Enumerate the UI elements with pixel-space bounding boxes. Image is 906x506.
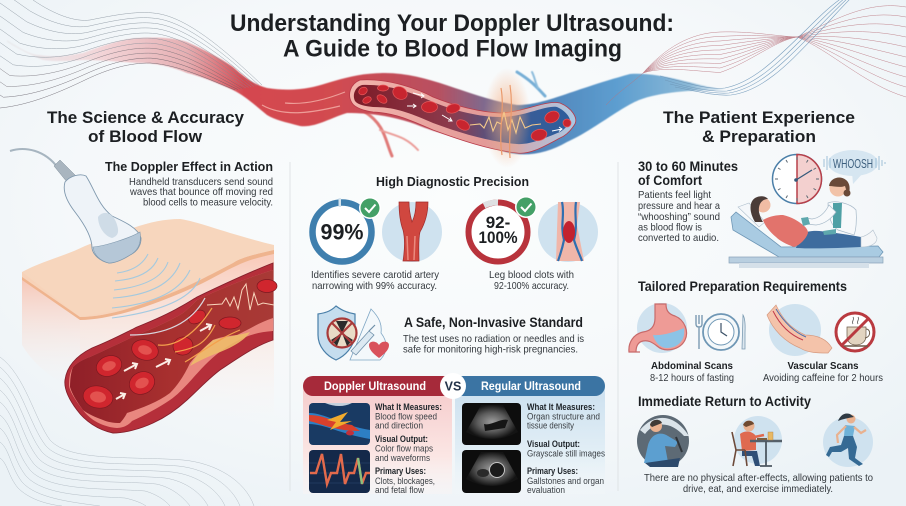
probe tip [93,232,140,263]
ultrasound glow [483,68,531,168]
skin edge band [22,250,274,320]
doppler details: What It Measures: [375,402,442,412]
left heading: The Science & Accuracy [47,108,245,127]
artery inner wall [69,270,273,428]
caption: leg clots: Leg blood clots with [489,269,574,281]
regular details: Grayscale still images [527,448,605,458]
doppler details: Clots, blockages, [375,476,435,486]
sound waves [112,254,205,335]
doppler effect text block [105,159,273,208]
bed legs [739,263,869,268]
pillow [738,203,765,227]
doppler effect text block: blood cells to measure velocity. [143,196,273,208]
title: A Guide to Blood Flow Imaging [283,36,622,62]
probe neck [54,160,76,182]
safe non-invasive text block: safe for monitoring high-risk pregnancies. [403,344,578,356]
comfort text block: Patients feel light [638,189,711,201]
ring: 92-100%: 92- [486,213,510,232]
regular details: Gallstones and organ [527,476,604,486]
column dividers [290,162,618,491]
bed [731,212,883,257]
probe body [64,175,141,263]
caption: carotid: Identifies severe carotid artery [311,269,440,281]
comfort text block: as blood flow is [638,222,702,234]
icon: safety shield [318,306,389,360]
cell centres [89,344,153,404]
caption: leg clots: 92-100% accuracy. [494,280,569,292]
vs badge [440,373,466,399]
patient legs [796,231,861,248]
icon: eating [732,416,782,466]
comfort text block: “whooshing” sound [638,211,720,223]
doppler title: Doppler Ultrasound [324,379,426,393]
vascular scans caption [763,360,883,384]
regular details: Visual Output: [527,439,580,449]
doctor head [829,178,850,196]
vertical sound arcs [501,85,511,158]
icon: carotid artery [382,202,442,262]
closing note: There are no physical after-effects, allowing patients to [644,472,873,484]
right heading: The Patient Experience [663,108,855,127]
illustration: patient and sonographer [729,178,883,268]
heading: immediate return: Immediate Return to Activity [638,394,811,409]
title: Understanding Your Doppler Ultrasound: [230,10,674,37]
second glove [823,229,836,235]
image: waveform chart [309,450,370,493]
tissue block [22,272,80,392]
regular details [527,402,605,495]
doctor arm [806,205,836,225]
vessel tube wall [350,80,576,153]
tissue front [80,250,274,420]
abdominal scans caption: Abdominal Scans [651,360,733,372]
icon: running [823,413,873,467]
patient socks [861,230,877,247]
probe cable [10,149,58,168]
icon: clock [772,154,822,204]
safe non-invasive text block: The test uses no radiation or needles and is [403,333,584,345]
safe non-invasive text block: A Safe, Non-Invasive Standard [404,315,583,330]
abdominal scans caption: 8-12 hours of fasting [650,372,734,384]
artery flow arrows [116,324,211,399]
artery red blood cells [81,280,277,410]
doppler details: Primary Uses: [375,466,426,476]
doppler details: Blood flow speed [375,412,437,422]
caption: carotid [311,269,440,292]
ring: 92-100% [468,202,528,262]
doppler header [303,376,453,396]
artery outer wall [65,263,273,433]
doppler details: Color flow maps [375,444,433,454]
icon: plate clock with cutlery [696,314,745,350]
doppler details: Visual Output: [375,434,428,444]
icon: leg clot [538,202,598,262]
heading: High Diagnostic Precision [376,174,529,189]
doppler details [375,402,442,495]
icon: no caffeine [836,313,874,351]
regular column background [455,386,605,494]
central blood vessel illustration [7,38,725,168]
abdominal scans caption [650,360,734,384]
closing note [644,472,873,495]
bed base [729,257,883,263]
icon: driving [637,415,689,467]
caption: carotid: narrowing with 99% accuracy. [312,280,437,292]
vs badge: VS [445,380,461,394]
artery waveform [207,284,274,310]
skin surface [22,219,274,317]
decorative wave lines: top left [0,0,262,108]
icon: arm [767,304,832,356]
ring: 99% [312,198,372,262]
flow arrows [407,93,562,132]
doppler details: and direction [375,420,423,430]
comfort text block: pressure and hear a [638,200,720,212]
decorative wave lines: bottom left [0,357,254,506]
doppler effect text block: Handheld transducers send sound [129,176,273,188]
regular details: Primary Uses: [527,466,578,476]
ring: 99%: 99% [320,220,364,244]
image: grayscale scan 1 [462,403,521,445]
vascular scans caption: Avoiding caffeine for 2 hours [763,372,883,384]
right heading: & Preparation [702,127,816,146]
left heading: of Blood Flow [88,127,203,146]
comfort text block: 30 to 60 Minutes [638,159,738,174]
doppler effect text block: The Doppler Effect in Action [105,159,273,174]
right heading [663,108,855,146]
whoosh speech bubble [824,150,885,184]
closing note: drive, eat, and exercise immediately. [683,483,833,495]
patient head [750,196,770,222]
doctor hand with probe [801,217,810,226]
regular header [453,376,605,396]
ribbon highlights [262,92,345,113]
doppler details: and waveforms [375,453,430,463]
doctor scrubs [833,203,842,228]
regular details: Organ structure and [527,412,600,422]
regular details: What It Measures: [527,402,595,412]
artery lumen [70,270,273,423]
image: color flow map [309,403,370,445]
red blood cells [357,84,571,142]
caption: leg clots [489,269,574,292]
icon: stomach [629,303,687,353]
panel: high diagnostic precision [311,174,598,292]
orange flow streaks [158,308,240,362]
doppler column background [303,386,452,494]
vessel ribbon [7,38,725,154]
comfort text block: of Comfort [638,173,702,188]
left heading [47,108,245,146]
vessel side branches [365,72,545,156]
title [230,10,674,62]
comfort text block: converted to audio. [638,232,719,244]
comfort text block [638,159,738,244]
regular title: Regular Ultrasound [481,379,581,393]
probe highlight [98,213,118,238]
panel: comparison table [303,373,605,495]
whoosh speech bubble: WHOOSH [833,157,873,171]
safe non-invasive text block [403,315,584,356]
vascular scans caption: Vascular Scans [788,360,859,372]
doctor coat [828,202,856,235]
decorative wave lines: top right [606,6,906,105]
vessel lumen [354,85,570,144]
ring: 92-100%: 100% [478,228,518,247]
heading: tailored preparation: Tailored Preparation Requirements [638,279,847,294]
check badge [515,196,537,218]
waveform [470,112,541,133]
doppler details: and fetal flow [375,485,424,495]
regular details: evaluation [527,485,565,495]
check badge [359,197,381,219]
doppler effect text block: waves that bounce off moving red [129,186,273,198]
regular details: tissue density [527,420,574,430]
patient torso [763,215,808,247]
image: grayscale scan 2 [462,450,521,493]
plaque [190,332,250,366]
decorative wave lines: top right blue [660,0,851,95]
doppler illustration: probe over artery [10,149,277,433]
